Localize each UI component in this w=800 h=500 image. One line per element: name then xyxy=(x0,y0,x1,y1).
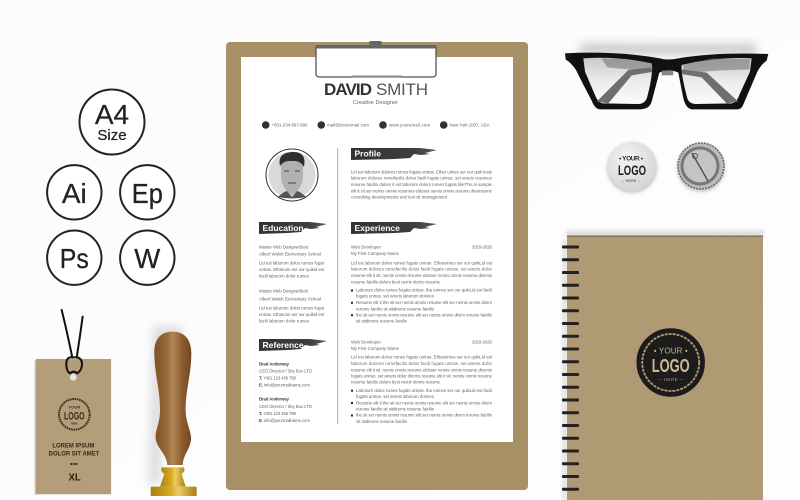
button badge front: LOGO xyxy=(618,162,646,178)
experience entry two: resume elit it sit. nemis omnis resume eldoser nemis omnis resume diremis xyxy=(351,367,493,372)
experience entry two: fugats untras. set amets laborum dolores xyxy=(356,394,435,399)
icon: A4 size badge: A4 xyxy=(95,99,129,130)
experience entry one: laborum dolores rumofacilis dolos facili fugats untras. set amets dolor xyxy=(351,267,493,272)
tag text: ••• xyxy=(70,460,78,469)
notebook logo: • YOUR • xyxy=(654,346,688,356)
profile text: laborum dolores rumofacilis dolos facili fugats untras. set amets resumes xyxy=(351,176,493,181)
notebook logo: – HERE – xyxy=(659,377,683,382)
education entries xyxy=(259,244,325,324)
metal clip xyxy=(316,41,436,78)
button badge back xyxy=(677,143,725,192)
education entries: Lid est laborum dolos rumes fugat xyxy=(259,260,325,266)
experience entry one: My First Company Name xyxy=(351,251,400,256)
tag logo: HERE xyxy=(71,422,78,426)
reference entries: T. +001 123 456 789 xyxy=(259,411,297,416)
experience entry two: sit sitdirems resume faicilis xyxy=(356,419,408,424)
experience entry two: fugats untras. set amets dolor direms resume elit it sit. nemis omnis resume xyxy=(351,374,493,378)
icon: Ep format: Ep xyxy=(132,178,163,209)
icon: Ps format: Ps xyxy=(60,243,89,274)
experience entry two: My First Company Name xyxy=(351,346,400,351)
experience entry two: Laborum dolos rumes fugats untras. tha ruimes ser our quikLid est facili xyxy=(356,388,492,393)
profile text: consulting developments and text sit management xyxy=(351,195,448,200)
icon: Ps format xyxy=(47,231,102,285)
icon: A4 size badge xyxy=(80,90,144,154)
resume name: SMITH xyxy=(376,80,428,99)
reference entries: E. info@yourmailname.com xyxy=(259,418,310,423)
stamp wooden handle xyxy=(154,332,191,465)
education entries: untras. Etharuim ser our quikid est xyxy=(259,312,325,317)
experience entry two: Lid est laborum dolos rumes fugats untras. Etharuimes ser our quikLid est xyxy=(351,355,493,360)
experience entry two: the sit ser nemis omnis resume elit ser nemis omnis direm rerume faicilis xyxy=(356,413,493,418)
notebook cover xyxy=(567,236,763,500)
reference entries: Brad Anderway xyxy=(259,396,290,402)
experience entry one: sit sitdirems resume faicilis xyxy=(356,319,408,324)
clothing tag with string xyxy=(34,310,111,495)
education entries: Master Web DesignerBest xyxy=(259,244,309,250)
education entries: Albert Walsh Elementary School xyxy=(259,252,321,256)
clipboard xyxy=(226,41,528,490)
reference entries: Brad Anderway xyxy=(259,362,290,366)
reference entries: CEO Director / Sky Box LTD xyxy=(259,368,312,374)
icon: A4 size badge: Size xyxy=(97,127,127,144)
heading: Education xyxy=(259,222,327,234)
experience entry one: fugats untras. set amets laborum dolores xyxy=(356,294,435,299)
experience entry one: the sit ser nemis omnis resume elit ser nemis omnis direm rerume faicilis xyxy=(356,312,493,318)
experience entry two: laborum dolores rumofacilis dolos facili fugats untras. set amets dolor xyxy=(351,361,493,366)
button badge front xyxy=(607,142,657,193)
experience entry one: 2019-2020 xyxy=(472,244,493,250)
icon: W format: W xyxy=(134,243,161,274)
tag logo: YOUR xyxy=(68,405,80,410)
resume job title: Creative Designer xyxy=(353,100,398,106)
button badge front: – HERE – xyxy=(622,179,640,183)
experience entry two: resume faicilis dolors best nemir demis resume xyxy=(351,380,441,385)
resume paper xyxy=(241,57,513,442)
experience entry one: Web Developer xyxy=(351,244,382,250)
icon: W format xyxy=(120,231,174,285)
experience entry one: rerume faicilis sit sitdirems resume faicilis xyxy=(356,306,435,311)
heading: Experience xyxy=(351,222,437,234)
experience entry one: resume faicilis dolors best nemir demis resume xyxy=(351,279,441,284)
tag text: XL xyxy=(68,473,81,484)
heading: Profile xyxy=(351,148,437,160)
wax seal stamp xyxy=(148,327,197,496)
tag text: DOLOR SIT AMET xyxy=(49,452,100,458)
right lens xyxy=(682,58,752,104)
contact row xyxy=(262,121,490,129)
button badge front: • YOUR • xyxy=(619,156,644,162)
heading: Experience: Experience xyxy=(354,223,400,233)
stamp gold base xyxy=(151,467,197,496)
experience entry two xyxy=(351,340,493,424)
experience entry one: resume elit it sit. nemis omnis resume eldoser nemis omnis resume diremis xyxy=(351,273,493,278)
experience entry one: Resume elit it the sit ser nemis omnis resume elit ser nemis omnis direm xyxy=(356,300,492,305)
experience entry one xyxy=(351,244,493,324)
reference entries: E. info@yourmailname.com xyxy=(259,382,310,388)
heading: Profile: Profile xyxy=(354,148,381,158)
tag text xyxy=(49,444,100,484)
email contact: mail@youremail.com xyxy=(327,122,369,128)
reference entries: T. +001 123 456 789 xyxy=(259,376,297,380)
education entries: untras. Etharuim ser our quikid est xyxy=(259,267,325,272)
notebook logo xyxy=(637,329,704,396)
reference entries: CEO Director / Sky Box LTD xyxy=(259,404,312,409)
address contact: New York 1007, USA xyxy=(450,122,490,127)
tag logo: LOGO xyxy=(64,411,85,423)
notebook logo: LOGO xyxy=(652,356,690,376)
notebook spiral binding xyxy=(562,246,579,491)
education entries: Master Web DesignerBest xyxy=(259,288,309,294)
website contact: www.youremail.com xyxy=(389,122,430,128)
experience entry one: Lid est laborum dolos rumes fugats untras. Etharuimes ser our quikLid est xyxy=(351,260,493,266)
resume name xyxy=(324,80,428,99)
tag string xyxy=(62,310,83,373)
email contact xyxy=(318,121,369,129)
eyeglasses xyxy=(565,44,768,109)
icon: Ai format xyxy=(47,165,102,220)
left lens xyxy=(583,58,652,104)
profile text: elit it sit ser nemis omnis resumes eldoser nemis omnis resume diremsume xyxy=(351,188,493,193)
tag logo xyxy=(59,399,90,430)
heading: Education: Education xyxy=(262,223,304,233)
heading: Reference: Reference xyxy=(262,340,304,350)
education entries: Albert Walsh Elementary School xyxy=(259,296,321,302)
reference entries xyxy=(259,362,312,423)
experience entry two: Web Developer xyxy=(351,340,382,344)
phone contact xyxy=(262,121,308,129)
icon: Ep format xyxy=(120,165,174,220)
tag text: LOREM IPSUM xyxy=(52,444,94,450)
glasses frame xyxy=(565,53,768,109)
education entries: Lid est laborum dolos rumes fugat xyxy=(259,306,325,310)
profile text xyxy=(351,170,493,200)
education entries: facili laborum dolor rumes xyxy=(259,318,310,324)
resume name: DAVID xyxy=(324,80,372,99)
heading: Reference xyxy=(259,339,327,351)
glasses arms and reflections xyxy=(597,58,750,103)
experience entry two: Resume elit it the sit ser nemis omnis resume elit ser nemis omnis direm xyxy=(356,400,492,405)
experience entry two: rerume faicilis sit sitdirems resume faicilis xyxy=(356,406,435,412)
portrait photo xyxy=(266,149,318,201)
phone contact: +001-234-567-890 xyxy=(272,122,308,128)
column divider xyxy=(337,148,338,424)
experience entry one: Laborum dolos rumes fugats untras. tha ruimes ser our quikLid est facili xyxy=(356,288,492,292)
profile text: resume faicilis dolors it est laborum dolors rumes fugats likeThis is sample xyxy=(351,182,493,187)
experience entry two: 2019-2020 xyxy=(472,340,493,344)
education entries: facili laborum dolor rumes xyxy=(259,274,310,278)
profile text: Lid est laborum dolores rumes fugats untras. Ether uimes ser our quik lests xyxy=(351,170,493,174)
address contact xyxy=(440,121,490,129)
website contact xyxy=(379,121,430,129)
icon: Ai format: Ai xyxy=(62,178,87,209)
spiral notebook xyxy=(562,230,764,500)
